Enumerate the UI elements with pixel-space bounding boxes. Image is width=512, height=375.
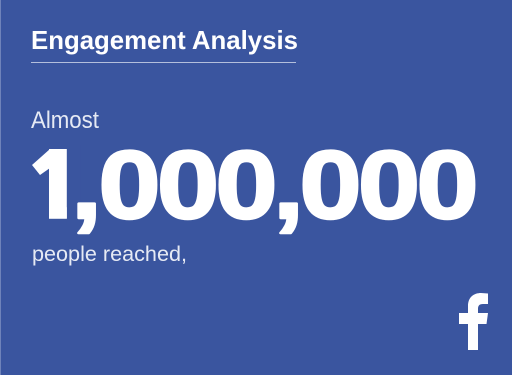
title: Engagement Analysis — [31, 25, 298, 55]
big number: 1 — [29, 130, 83, 239]
caption: people reached, — [32, 242, 187, 266]
big number: ,000,000 — [71, 131, 479, 239]
intro text: Almost — [31, 107, 99, 134]
icon: facebook logo — [459, 293, 488, 350]
